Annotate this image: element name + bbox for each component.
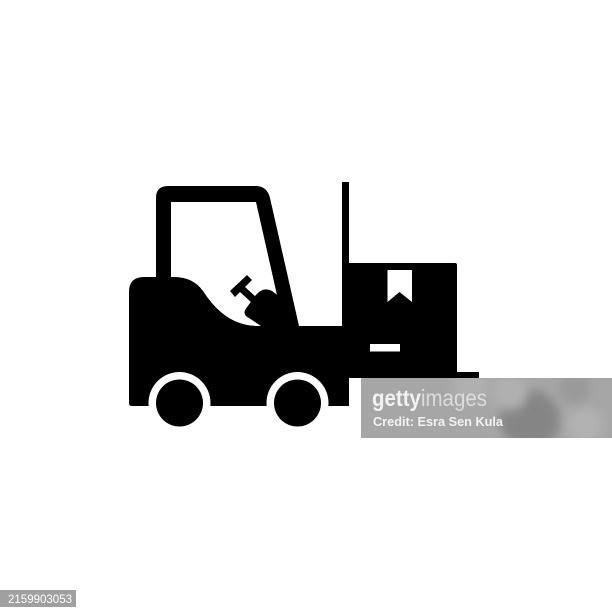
watermark banner (361, 378, 612, 438)
watermark logo text: gettyimages (372, 385, 487, 411)
vehicle body (129, 277, 349, 406)
icon: forklift (129, 182, 479, 434)
seat (244, 289, 286, 326)
cargo box (349, 263, 479, 378)
box label: bar (370, 344, 400, 352)
steering wheel (230, 275, 257, 303)
box label: bookmark (388, 270, 412, 302)
image id tag (0, 590, 76, 607)
image id tag: 2159903053 (8, 594, 72, 606)
front wheel (148, 372, 210, 434)
forklift icon infographic (0, 182, 612, 607)
rear wheel (266, 372, 328, 434)
watermark credit text: Credit: Esra Sen Kula (373, 414, 504, 429)
cab frame (156, 186, 299, 326)
mast (342, 182, 349, 406)
